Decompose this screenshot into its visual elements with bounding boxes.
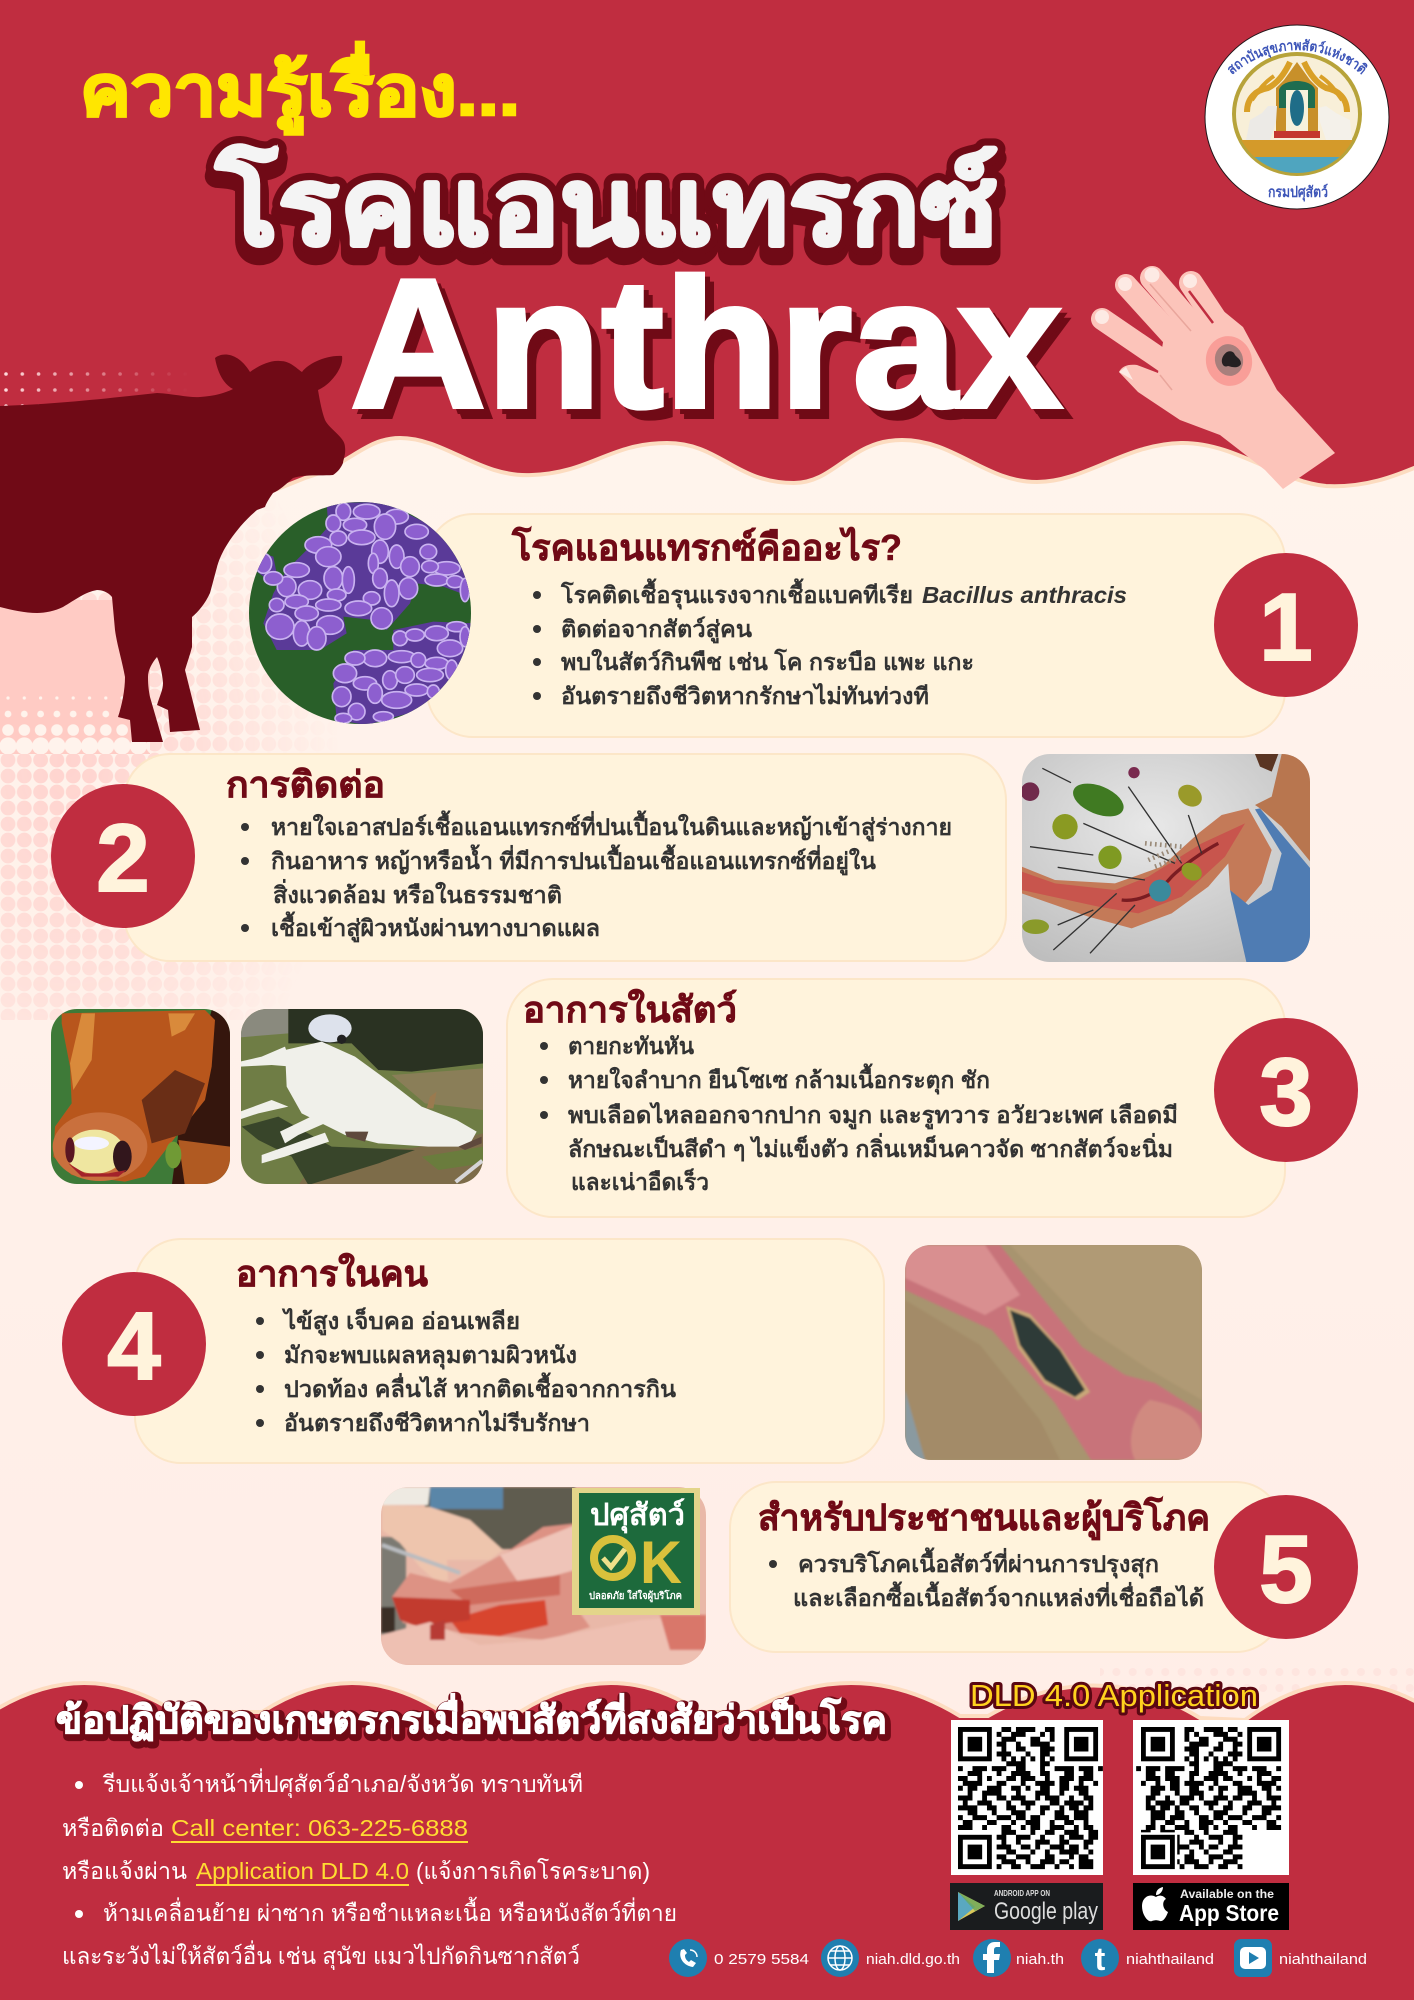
bullet list: หายใจลำบาก ยืนโซเซ กล้ามเนื้อกระตุก ชัก: [568, 1063, 990, 1095]
bottom section heading: ข้อปฏิบัติของเกษตรกรเมื่อพบสัตว์ที่สงสัยว่าเป็นโรค: [56, 1693, 887, 1742]
farmer instructions: [62, 1768, 677, 1970]
logo: department name: กรมปศุสัตว์: [1268, 183, 1328, 202]
photo: bacteria entering arm: [1021, 754, 1312, 963]
advice text: [769, 1547, 1204, 1611]
OK badge: [572, 1488, 700, 1615]
title: Thai disease name: โรคแอนแทรกซ์: [215, 144, 998, 267]
bullet list: กินอาหาร หญ้าหรือน้ำ ที่มีการปนเปื้อนเชื้อแอนแทรกซ์ที่อยู่ใน: [271, 844, 876, 876]
youtube name: niahthailand: [1279, 1951, 1367, 1968]
logo: seal emblem: [1234, 54, 1360, 178]
OK badge: ปลอดภัย ใส่ใจผู้บริโภค: [589, 1589, 682, 1603]
title: Anthrax: Anthrax: [359, 250, 1071, 456]
bullet list: สิ่งแวดล้อม หรือในธรรมชาติ: [273, 878, 562, 908]
number badge 1: 1: [1259, 574, 1313, 681]
farmer instructions: ห้ามเคลื่อนย้าย ผ่าซาก หรือชำแหละเนื้อ หรือหนังสัตว์ที่ตาย: [103, 1897, 677, 1926]
bullet list: และเน่าอืดเร็ว: [571, 1167, 709, 1195]
heading: สำหรับประชาชนและผู้บริโภค: [758, 1496, 1210, 1541]
number badge 3: [1214, 1018, 1358, 1162]
heading: อาการในสัตว์: [523, 988, 737, 1030]
icon: tumblr: [1081, 1939, 1119, 1977]
farmer instructions: และระวังไม่ให้สัตว์อื่น เช่น สุนัข แมวไปกัดกินซากสัตว์: [62, 1940, 580, 1970]
bullet list: ปวดท้อง คลื่นไส้ หากติดเชื้อจากการกิน: [284, 1372, 676, 1402]
number badge 3: 3: [1259, 1039, 1313, 1146]
bullet list: โรคติดเชื้อรุนแรงจากเชื้อแบคทีเรีย: [560, 578, 913, 610]
number badge 1: [1214, 553, 1358, 697]
QR code: Google Play: [951, 1720, 1103, 1875]
heading: การติดต่อ: [226, 764, 385, 805]
bullet list: เชื้อเข้าสู่ผิวหนังผ่านทางบาดแผล: [271, 911, 600, 943]
panel 1: what is anthrax: [249, 502, 1358, 737]
photo: butchering meat with OK badge: [381, 1487, 706, 1665]
top dotted decoration: [4, 372, 171, 406]
farmer instructions: Call center: 063-225-6888: [171, 1815, 468, 1841]
panel 5: for consumers: [381, 1482, 1358, 1665]
farmer instructions: (แจ้งการเกิดโรคระบาด): [416, 1858, 650, 1884]
photo: arm with black lesion: [905, 1245, 1202, 1460]
bullet list: Bacillus anthracis: [922, 582, 1127, 608]
icon: hand with lesion: [1095, 268, 1335, 489]
halftone dot background: [0, 500, 1414, 1700]
bullet list: ลักษณะเป็นสีดำ ๆ ไม่แข็งตัว กลิ่นเหม็นคาวจัด ซากสัตว์จะนิ่ม: [568, 1132, 1173, 1162]
icon: phone: [669, 1939, 707, 1977]
title: Anthrax: Anthrax: [355, 245, 1067, 451]
advice text: และเลือกซื้อเนื้อสัตว์จากแหล่งที่เชื่อถือได้: [793, 1581, 1204, 1611]
number badge 2: [51, 784, 195, 928]
bullet list: [256, 1306, 676, 1436]
icon: tumblr: t: [1095, 1941, 1106, 1977]
heading: โรคแอนแทรกซ์คืออะไร?: [511, 526, 902, 568]
bullet list: [241, 810, 952, 943]
number badge 5: 5: [1259, 1516, 1313, 1623]
photo: bacteria micrograph: [249, 502, 472, 725]
logo: national institute of animal health: [1204, 24, 1390, 210]
advice text: ควรบริโภคเนื้อสัตว์ที่ผ่านการปรุงสุก: [798, 1547, 1159, 1579]
phone number: 0 2579 5584: [714, 1951, 809, 1968]
farmer instructions: รีบแจ้งเจ้าหน้าที่ปศุสัตว์อำเภอ/จังหวัด ทราบทันที: [102, 1768, 583, 1798]
number badge 2: 2: [96, 805, 150, 912]
QR code: App Store: [1133, 1720, 1289, 1875]
farmer instructions: หรือแจ้งผ่าน: [62, 1858, 187, 1884]
badge: App Store: Available on the: [1180, 1887, 1274, 1901]
OK badge: K: [640, 1529, 682, 1596]
badge: App Store: [1133, 1883, 1289, 1930]
badge: Google Play: Google play: [994, 1898, 1098, 1925]
bullet list: พบเลือดไหลออกจากปาก จมูก และรูทวาร อวัยวะเพศ เลือดมี: [568, 1101, 1178, 1130]
bullet list: อันตรายถึงชีวิตหากไม่รีบรักษา: [284, 1409, 590, 1436]
title: Thai disease name: โรคแอนแทรกซ์: [215, 144, 998, 267]
website: niah.dld.go.th: [866, 1951, 960, 1968]
bullet list: ติดต่อจากสัตว์สู่คน: [561, 616, 752, 644]
bullet list: พบในสัตว์กินพืช เช่น โค กระบือ แพะ แกะ: [561, 648, 974, 675]
tumblr name: niahthailand: [1126, 1951, 1214, 1968]
facebook name: niah.th: [1016, 1951, 1064, 1968]
farmer instructions: Application DLD 4.0: [196, 1858, 409, 1884]
bullet list: [540, 1033, 1178, 1195]
bullet list: อันตรายถึงชีวิตหากรักษาไม่ทันท่วงที: [561, 682, 929, 709]
panel 4: symptoms in humans: [62, 1239, 1202, 1463]
panel 2: transmission: [51, 754, 1312, 963]
number badge 5: [1214, 1495, 1358, 1639]
bullet list: [533, 578, 1127, 709]
badge: Google Play: [950, 1883, 1103, 1930]
bullet list: มักจะพบแผลหลุมตามผิวหนัง: [284, 1342, 577, 1370]
icon: globe: [821, 1939, 859, 1977]
logo: curved name: สถาบันสุขภาพสัตว์แห่งชาติ: [1228, 38, 1368, 75]
heading: อาการในคน: [236, 1252, 428, 1294]
icon: facebook: [973, 1939, 1011, 1977]
title: small heading: ความรู้เรื่อง...: [80, 41, 520, 135]
bottom red band: [0, 1683, 1414, 2000]
cow silhouette: [0, 355, 345, 742]
OK badge: ปศุสัตว์: [590, 1498, 685, 1534]
bullet list: ไข้สูง เจ็บคอ อ่อนเพลีย: [281, 1306, 520, 1336]
photo: dead white cow: [240, 1009, 483, 1185]
badge: App Store: App Store: [1179, 1900, 1279, 1926]
number badge 4: [62, 1272, 206, 1416]
title: Thai disease name: โรคแอนแทรกซ์: [215, 153, 998, 276]
title: Anthrax: Anthrax: [350, 240, 1062, 446]
farmer instructions: หรือติดต่อ: [62, 1815, 164, 1841]
bottom section heading: ข้อปฏิบัติของเกษตรกรเมื่อพบสัตว์ที่สงสัยว่าเป็นโรค: [58, 1696, 889, 1745]
number badge 4: 4: [107, 1293, 161, 1400]
icon: youtube: [1234, 1939, 1272, 1977]
bullet list: ตายกะทันหัน: [568, 1033, 694, 1059]
contact row: [669, 1939, 1367, 1977]
top red header band: [0, 0, 1414, 500]
photo: cow bleeding nose: [51, 1009, 232, 1187]
DLD app title: DLD 4.0 Application: [970, 1678, 1258, 1713]
panel 3: symptoms in animals: [51, 979, 1358, 1217]
badge: Google Play: ANDROID APP ON: [994, 1889, 1050, 1898]
bullet list: หายใจเอาสปอร์เชื้อแอนแทรกซ์ที่ปนเปื้อนในดินและหญ้าเข้าสู่ร่างกาย: [271, 810, 952, 842]
